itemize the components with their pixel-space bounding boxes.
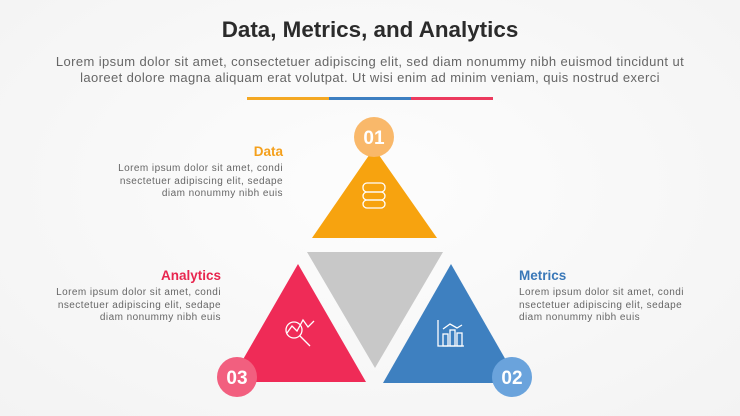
- text block: Analytics: Lorem ipsum dolor sit amet, condi: [56, 287, 221, 298]
- badge 01: 01: [363, 128, 385, 149]
- badge 02: 02: [501, 368, 523, 389]
- subtitle: laoreet dolore magna aliquam erat volutpat. Ut wisi enim ad minim veniam, quis nostrud exerci: [80, 70, 660, 84]
- icon: magnifier chart: [286, 320, 314, 346]
- subtitle: Lorem ipsum dolor sit amet, consectetuer adipiscing elit, sed diam nonummy nibh euismod tincidunt ut: [56, 54, 684, 69]
- divider: [247, 97, 493, 100]
- badge 01: [354, 117, 394, 157]
- text block: Metrics: Metrics: [519, 268, 566, 283]
- text block: Metrics: nsectetuer adipiscing elit, sedape: [519, 300, 682, 310]
- text block: Analytics: Analytics: [161, 268, 221, 283]
- text block: Data: Lorem ipsum dolor sit amet, condi: [118, 163, 283, 174]
- badge 03: 03: [226, 368, 248, 389]
- text block: Analytics: diam nonummy nibh euis: [100, 312, 221, 323]
- text block: Metrics: Lorem ipsum dolor sit amet, condi: [519, 287, 684, 298]
- title: Data, Metrics, and Analytics: [222, 17, 518, 42]
- text block: Data: Data: [254, 144, 283, 159]
- triangle: metrics: [383, 264, 519, 383]
- text block: Data: nsectetuer adipiscing elit, sedape: [120, 176, 283, 186]
- badge 03: [217, 357, 257, 397]
- icon: bar chart: [438, 320, 464, 346]
- text block: Data: diam nonummy nibh euis: [162, 188, 283, 199]
- icon: database: [363, 183, 385, 208]
- subtitle: [56, 54, 684, 84]
- triangle: gray center: [307, 252, 443, 368]
- text block: Metrics: diam nonummy nibh euis: [519, 312, 640, 323]
- text block: Analytics: [56, 268, 221, 323]
- triangle: data: [312, 148, 437, 238]
- text block: Data: [118, 144, 284, 199]
- text block: Analytics: nsectetuer adipiscing elit, sedape: [58, 300, 221, 310]
- triangle: analytics: [230, 264, 366, 382]
- badge 02: [492, 357, 532, 397]
- text block: Metrics: [519, 268, 684, 323]
